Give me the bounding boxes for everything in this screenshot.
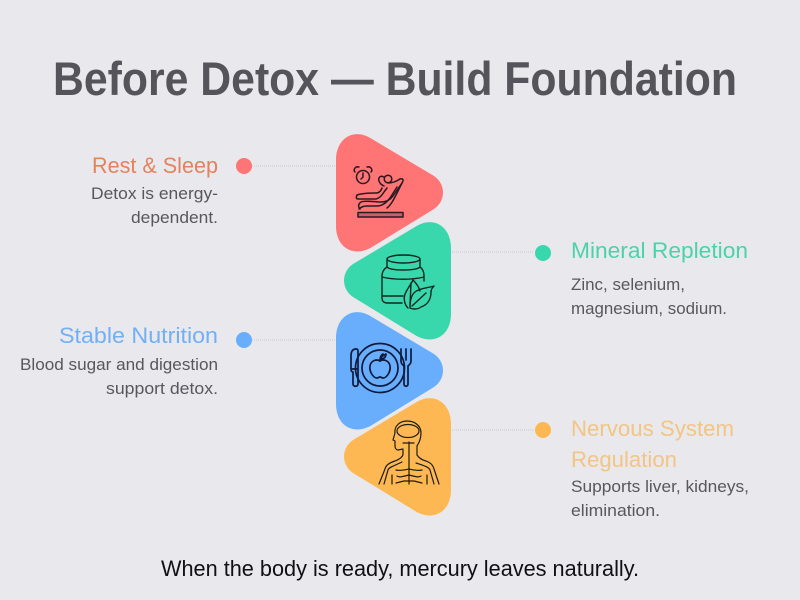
dot: stable nutrition <box>236 332 252 348</box>
right item: mineral repletion <box>535 238 748 318</box>
icon: plate with apple and cutlery <box>351 344 411 392</box>
panel: stable nutrition triangle <box>336 312 443 429</box>
text: nervous system description: elimination. <box>571 501 660 520</box>
dot: nervous system <box>535 422 551 438</box>
heading: nervous system regulation: Regulation <box>571 447 677 472</box>
panel: rest and sleep triangle <box>336 134 443 251</box>
text: rest and sleep description: dependent. <box>131 208 218 227</box>
title: Before Detox — Build Foundation <box>53 52 737 105</box>
icon: human head and nervous system <box>379 421 439 484</box>
icon: supplement jar with leaves <box>382 255 434 309</box>
connector: rest and sleep <box>252 165 337 167</box>
text: stable nutrition description: Blood sugar and digestion <box>20 355 218 374</box>
heading: mineral repletion: Mineral Repletion <box>571 238 748 263</box>
connector: stable nutrition <box>252 339 337 341</box>
heading: rest and sleep: Rest & Sleep <box>92 153 218 178</box>
connector: nervous system <box>450 429 534 431</box>
left item: rest and sleep <box>91 153 252 227</box>
dot: rest and sleep <box>236 158 252 174</box>
left item: stable nutrition <box>20 323 252 398</box>
connector: mineral repletion <box>450 251 534 253</box>
footer statement: When the body is ready, mercury leaves naturally. <box>161 556 639 581</box>
heading: stable nutrition: Stable Nutrition <box>59 323 218 348</box>
text: mineral repletion description: magnesium, sodium. <box>571 299 727 318</box>
text: nervous system description: Supports liver, kidneys, <box>571 477 749 496</box>
text: rest and sleep description: Detox is energy- <box>91 184 218 203</box>
text: stable nutrition description: support detox. <box>106 379 218 398</box>
heading: nervous system regulation: Nervous System <box>571 416 734 441</box>
icon: reclining person with alarm clock <box>354 167 403 217</box>
panel: mineral repletion triangle <box>344 222 451 339</box>
panel: nervous system triangle <box>344 398 451 515</box>
dot: mineral repletion <box>535 245 551 261</box>
text: mineral repletion description: Zinc, selenium, <box>571 275 685 294</box>
right item: nervous system regulation <box>535 416 749 520</box>
